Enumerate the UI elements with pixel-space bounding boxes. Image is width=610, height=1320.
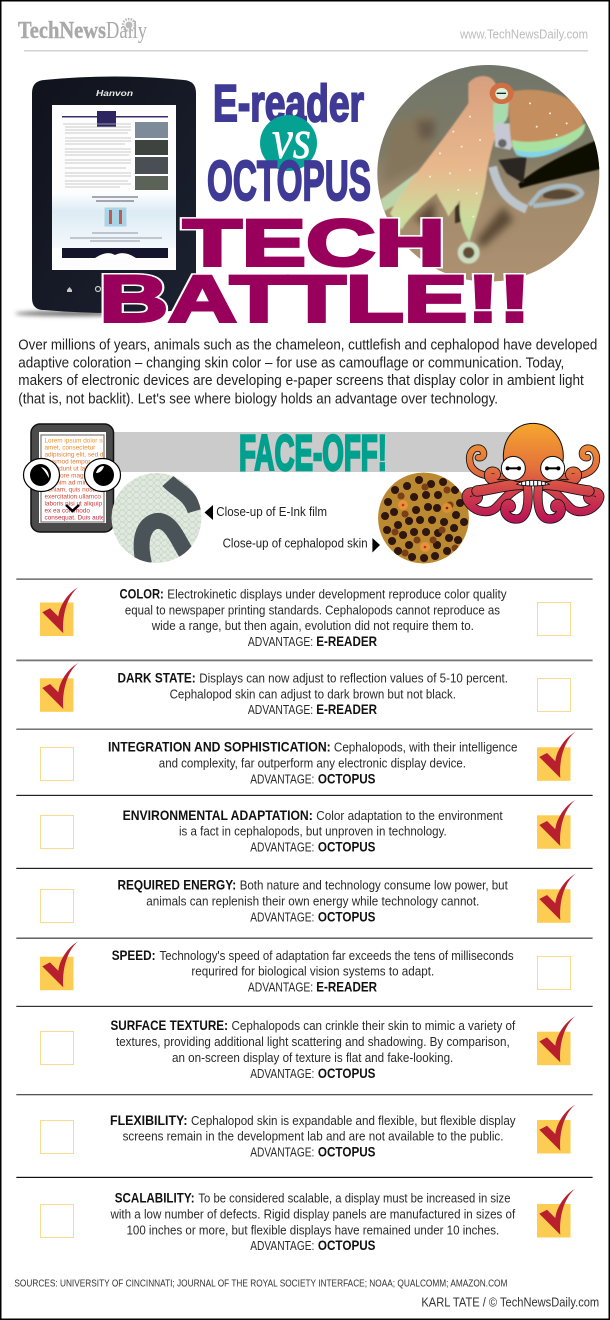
title: TECH: TECH bbox=[183, 206, 445, 280]
cartoon e-reader text: veniam, quis nostrud bbox=[44, 486, 104, 494]
seabed background bbox=[383, 110, 513, 248]
row: dark state bbox=[40, 663, 570, 717]
text: flexibility: ADVANTAGE: bbox=[250, 1146, 314, 1160]
animal body bbox=[380, 76, 603, 261]
sources: SOURCES: UNIVERSITY OF CINCINNATI; JOURNAL OF THE ROYAL SOCIETY INTERFACE; NOAA; QUALCOMM; AMAZON.COM bbox=[14, 1279, 507, 1290]
check: e-reader bbox=[40, 587, 78, 636]
check: octopus bbox=[537, 732, 575, 781]
intro paragraph: (that is, not backlit). Let's see where biology holds an advantage over technology. bbox=[18, 391, 498, 407]
title: OCTOPUS: OCTOPUS bbox=[207, 149, 371, 213]
text: surface texture: Cephalopods can crinkle their skin to mimic a variety of bbox=[232, 1019, 516, 1033]
text: surface texture bbox=[110, 1017, 516, 1081]
empty box: octopus bbox=[538, 678, 570, 712]
octopus eyes bbox=[501, 456, 565, 480]
cartoon e-reader text: Lorem ipsum dolor sit bbox=[44, 438, 106, 444]
text: scalability: 100 inches or more, but flexible displays have remained under 10 inches. bbox=[126, 1223, 499, 1237]
e-reader device photo bbox=[15, 76, 196, 316]
text: required energy: REQUIRED ENERGY: bbox=[118, 876, 236, 892]
text: dark state: Displays can now adjust to reflection values of 5-10 percent. bbox=[199, 672, 508, 686]
text: speed bbox=[112, 947, 514, 995]
header bbox=[18, 18, 588, 52]
text: environmental adaptation: ENVIRONMENTAL ADAPTATION: bbox=[123, 807, 313, 823]
text: dark state bbox=[118, 670, 508, 717]
text: scalability: SCALABILITY: bbox=[115, 1190, 195, 1206]
cartoon e-reader text: incididunt ut labore bbox=[44, 466, 99, 472]
mantle bbox=[508, 89, 584, 148]
text: scalability bbox=[110, 1190, 516, 1253]
text: speed: requrired for biological vision systems to adapt. bbox=[191, 965, 434, 979]
text: required energy: animals can replenish their own energy while technology cannot. bbox=[146, 894, 479, 908]
cartoon e-reader text: exercitation ullamco bbox=[44, 494, 101, 500]
check: octopus bbox=[537, 800, 575, 849]
text: surface texture: an on-screen display of texture is flat and fake-looking. bbox=[172, 1051, 453, 1065]
empty box: e-reader bbox=[40, 1120, 74, 1154]
intro paragraph bbox=[18, 337, 597, 407]
text: color: equal to newspaper printing standards. Cephalopods cannot reproduce as bbox=[125, 604, 500, 618]
text: integration: ADVANTAGE: bbox=[250, 772, 314, 786]
text: environmental adaptation: OCTOPUS bbox=[318, 839, 376, 855]
text: flexibility: screens remain in the development lab and are not available to the public. bbox=[123, 1130, 503, 1144]
cartoon e-reader text: amet, consectetur bbox=[44, 444, 96, 452]
cartoon e-reader text: laboris nisi ut aliquip bbox=[44, 500, 102, 508]
e-ink close-up bbox=[112, 473, 202, 564]
divider rules bbox=[16, 578, 593, 1178]
row: flexibility bbox=[40, 1105, 575, 1160]
octopus mouth bbox=[517, 480, 549, 486]
text: environmental adaptation: Color adaptation to the environment bbox=[316, 809, 503, 823]
empty box: e-reader bbox=[40, 816, 74, 848]
text: environmental adaptation: ADVANTAGE: bbox=[250, 841, 314, 855]
cartoon e-reader text: consequat. Duis aute bbox=[44, 514, 105, 522]
text: surface texture: ADVANTAGE: bbox=[250, 1067, 314, 1081]
text: integration bbox=[108, 739, 518, 786]
cartoon e-reader text: ex ea commodo bbox=[44, 508, 90, 514]
cartoon e-reader text: adipisicing elit, sed do bbox=[44, 452, 107, 458]
row: integration and sophistication bbox=[40, 732, 575, 786]
empty box: octopus bbox=[538, 956, 570, 990]
check: octopus bbox=[537, 874, 575, 923]
text: color: ADVANTAGE: bbox=[248, 635, 313, 649]
text: environmental adaptation bbox=[123, 807, 503, 855]
text: integration: and complexity, far outperform any electronic display device. bbox=[159, 757, 466, 771]
text: scalability: To be considered scalable, a display must be increased in size bbox=[198, 1192, 511, 1206]
check: e-reader bbox=[40, 663, 78, 712]
text: color: COLOR: bbox=[120, 586, 164, 602]
text: speed: E-READER bbox=[316, 979, 377, 995]
vs badge: vs bbox=[272, 109, 311, 171]
e-reader device photo: Hanvon bbox=[96, 88, 133, 98]
intro paragraph: adaptive coloration – changing skin color – for use as camouflage or communication. Today, bbox=[18, 355, 564, 371]
text: required energy: Both nature and technology consume low power, but bbox=[240, 878, 508, 892]
text: integration: INTEGRATION AND SOPHISTICATION: bbox=[108, 739, 331, 755]
cartoon e-reader bbox=[24, 424, 120, 532]
text: scalability: OCTOPUS bbox=[318, 1237, 376, 1253]
logo: TechNewsDaily: Daily bbox=[106, 18, 147, 44]
text: dark state: Cephalopod skin can adjust to dark brown but not black. bbox=[170, 687, 456, 701]
text: flexibility: OCTOPUS bbox=[318, 1144, 376, 1160]
text: required energy: OCTOPUS bbox=[318, 908, 376, 924]
text: required energy: ADVANTAGE: bbox=[250, 910, 314, 924]
text: integration: Cephalopods, with their intelligence bbox=[334, 741, 518, 755]
empty box: octopus bbox=[538, 602, 570, 636]
title: BATTLE!!: BATTLE!! bbox=[100, 262, 530, 336]
check: octopus bbox=[537, 1189, 575, 1238]
text: scalability: with a low number of defects. Rigid display panels are manufactured in sizes of bbox=[110, 1208, 516, 1222]
row: speed bbox=[40, 941, 570, 995]
text: environmental adaptation: is a fact in cephalopods, but unproven in technology. bbox=[179, 825, 447, 839]
check: octopus bbox=[537, 1105, 575, 1154]
title: E-reader: E-reader bbox=[213, 75, 364, 133]
label: cephalopod skin: Close-up of cephalopod skin bbox=[223, 535, 368, 550]
text: required energy bbox=[118, 876, 508, 924]
cartoon e-reader text: eiusmod tempor bbox=[44, 458, 91, 466]
text: color: wide a range, but then again, evolution did not require them to. bbox=[151, 619, 474, 633]
text: color bbox=[120, 586, 507, 649]
text: integration: OCTOPUS bbox=[318, 770, 376, 786]
check: e-reader bbox=[40, 941, 78, 990]
empty box: e-reader bbox=[40, 1204, 74, 1238]
text: scalability: ADVANTAGE: bbox=[250, 1239, 314, 1253]
text: speed: Technology's speed of adaptation far exceeds the tens of milliseconds bbox=[160, 949, 514, 963]
face-off banner bbox=[112, 425, 516, 481]
cartoon e-reader text bbox=[44, 438, 103, 521]
empty box: e-reader bbox=[40, 890, 74, 922]
title: TECH bbox=[183, 206, 445, 280]
text: color: E-READER bbox=[316, 633, 377, 649]
row: environmental adaptation bbox=[40, 800, 575, 855]
text: dark state: DARK STATE: bbox=[118, 670, 196, 686]
empty box: e-reader bbox=[40, 1032, 74, 1064]
empty box: e-reader bbox=[40, 748, 74, 780]
text: color: Electrokinetic displays under development reproduce color quality bbox=[167, 588, 507, 602]
logo: TechNewsDaily: TechNews bbox=[18, 18, 106, 44]
title: BATTLE!!: BATTLE!! bbox=[100, 262, 530, 336]
intro paragraph: makers of electronic devices are developing e-paper screens that display color in ambient light bbox=[18, 373, 584, 389]
text: dark state: ADVANTAGE: bbox=[248, 703, 313, 717]
website url: www.TechNewsDaily.com bbox=[459, 26, 588, 42]
text: surface texture: OCTOPUS bbox=[318, 1065, 376, 1081]
cartoon eyes bbox=[24, 458, 120, 492]
cartoon e-reader text: et dolore magna aliqua. bbox=[44, 472, 112, 480]
row: scalability bbox=[40, 1189, 575, 1253]
octopus photo bbox=[377, 65, 600, 282]
title: TECH: TECH bbox=[183, 206, 445, 280]
cartoon e-reader text: Ut enim ad minim bbox=[44, 480, 94, 486]
text: flexibility: Cephalopod skin is expandable and flexible, but flexible display bbox=[191, 1114, 516, 1128]
check: octopus bbox=[537, 1016, 575, 1065]
row: surface texture bbox=[40, 1016, 575, 1081]
text: flexibility: FLEXIBILITY: bbox=[110, 1112, 188, 1128]
text: speed: SPEED: bbox=[112, 947, 156, 963]
text: speed: ADVANTAGE: bbox=[248, 981, 313, 995]
row: color bbox=[40, 586, 570, 649]
mantle underside bbox=[511, 123, 586, 152]
text: surface texture: SURFACE TEXTURE: bbox=[110, 1017, 228, 1033]
row: required energy bbox=[40, 874, 575, 924]
cephalopod skin close-up bbox=[378, 472, 469, 564]
text: flexibility bbox=[110, 1112, 516, 1160]
face-off banner: FACE-OFF! bbox=[239, 425, 387, 481]
text: surface texture: textures, providing additional light scattering and shadowing. By comparison, bbox=[116, 1035, 510, 1049]
title: BATTLE!! bbox=[100, 262, 530, 336]
text: dark state: E-READER bbox=[316, 701, 377, 717]
label: e-ink film: Close-up of E-Ink film bbox=[216, 504, 327, 519]
cartoon octopus bbox=[466, 423, 600, 519]
